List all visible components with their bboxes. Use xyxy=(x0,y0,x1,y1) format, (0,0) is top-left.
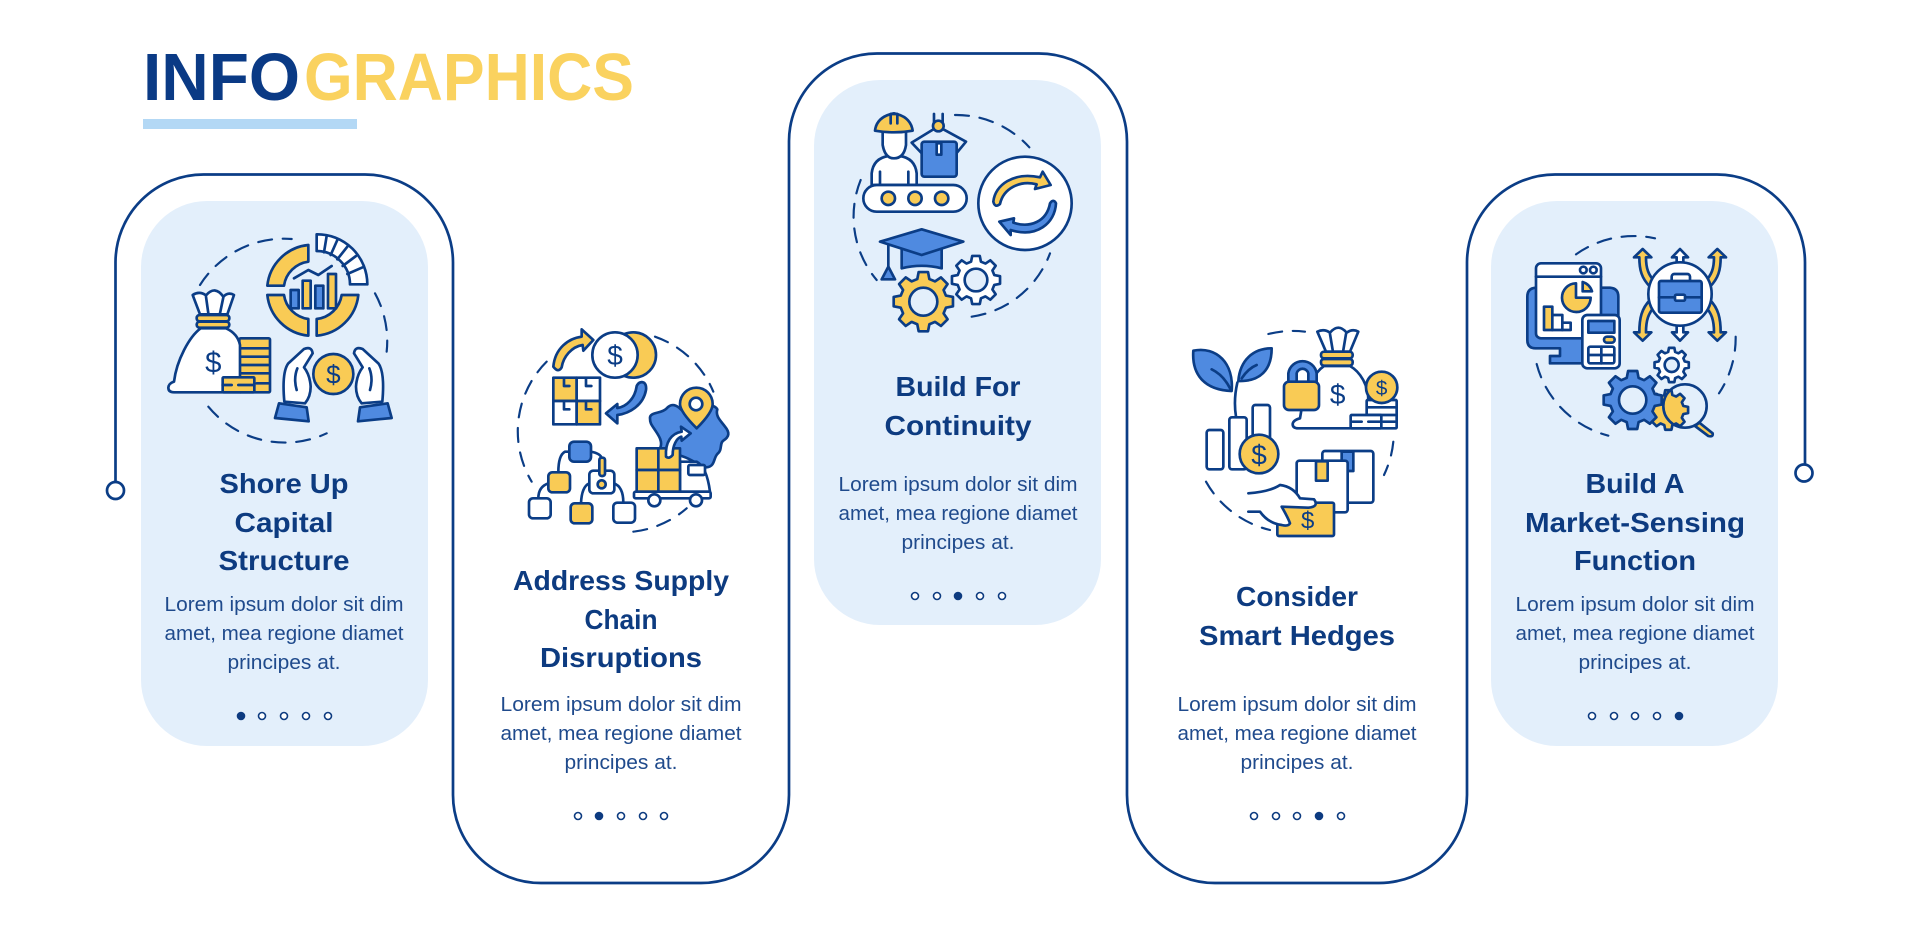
body text xyxy=(838,474,1078,554)
body text xyxy=(1516,594,1755,674)
icon: money bag, chart, coin in hands xyxy=(168,234,392,443)
icon: supply chain with coins, boxes, truck, flow tree xyxy=(518,329,728,532)
panel: build a market-sensing function xyxy=(1491,201,1778,746)
icon: money bag, chart, coin in hands: $ xyxy=(205,347,221,380)
heading xyxy=(1199,581,1395,651)
icon: plant, bars, lock, money bag, boxes, cash in hand xyxy=(1193,328,1397,536)
body text: Lorem ipsum dolor sit dim xyxy=(500,694,742,716)
title: INFO xyxy=(143,40,300,115)
pagination dots xyxy=(1250,812,1344,820)
heading: Chain xyxy=(584,604,658,635)
icon: plant, bars, lock, money bag, boxes, cash in hand: $ xyxy=(1376,377,1388,400)
icon: dashboard, calculator, briefcase with arrows, gears, magnifier xyxy=(1527,236,1736,436)
icon: plant, bars, lock, money bag, boxes, cash in hand: $ xyxy=(1330,379,1346,410)
heading xyxy=(884,371,1032,441)
pagination dots xyxy=(912,592,1006,600)
body text xyxy=(500,694,742,774)
body text: principes at. xyxy=(902,532,1014,554)
pagination dots xyxy=(1588,712,1682,720)
body text: Lorem ipsum dolor sit dim xyxy=(164,594,404,616)
panel: consider smart hedges xyxy=(1178,328,1417,820)
body text: amet, mea regione diamet xyxy=(1516,623,1755,645)
heading xyxy=(218,468,350,576)
title: GRAPHICS xyxy=(304,40,634,115)
body text: Lorem ipsum dolor sit dim xyxy=(838,474,1078,496)
heading: Function xyxy=(1574,545,1696,576)
heading: Continuity xyxy=(884,410,1032,441)
body text: amet, mea regione diamet xyxy=(500,723,742,745)
panel: address supply chain disruptions xyxy=(500,329,742,820)
panel: shore up capital structure xyxy=(141,201,428,746)
heading: Build A xyxy=(1586,468,1684,499)
title xyxy=(143,40,634,115)
body text: amet, mea regione diamet xyxy=(1178,723,1417,745)
body text: Lorem ipsum dolor sit dim xyxy=(1178,694,1416,716)
icon: plant, bars, lock, money bag, boxes, cash in hand: $ xyxy=(1301,507,1314,534)
body text: amet, mea regione diamet xyxy=(164,623,404,645)
pagination dots xyxy=(238,712,332,720)
body text: principes at. xyxy=(564,752,678,774)
pagination dots xyxy=(574,812,668,820)
body text: principes at. xyxy=(1240,752,1354,774)
heading: Shore Up xyxy=(220,468,348,499)
heading xyxy=(1525,468,1745,576)
icon: worker, conveyor, recycle arrows, graduation cap, gears xyxy=(854,113,1072,331)
heading: Build For xyxy=(896,371,1021,402)
heading: Market-Sensing xyxy=(1525,507,1745,538)
heading: Consider xyxy=(1236,581,1358,612)
heading: Capital xyxy=(234,507,334,538)
panel: build for continuity xyxy=(814,80,1101,625)
heading: Disruptions xyxy=(540,642,702,673)
body text xyxy=(1178,694,1417,774)
heading xyxy=(513,565,729,673)
icon: plant, bars, lock, money bag, boxes, cash in hand: $ xyxy=(1251,439,1267,470)
body text: amet, mea regione diamet xyxy=(838,503,1078,525)
body text xyxy=(164,594,404,674)
heading: Address Supply xyxy=(513,565,729,596)
icon: money bag, chart, coin in hands: $ xyxy=(326,359,341,389)
title underline xyxy=(143,119,357,129)
icon: supply chain with coins, boxes, truck, flow tree: $ xyxy=(607,340,623,371)
connecting outline frame xyxy=(107,54,1812,883)
body text: principes at. xyxy=(1578,652,1692,674)
heading: Smart Hedges xyxy=(1199,620,1395,651)
heading: Structure xyxy=(218,545,350,576)
body text: principes at. xyxy=(228,652,340,674)
body text: Lorem ipsum dolor sit dim xyxy=(1516,594,1754,616)
